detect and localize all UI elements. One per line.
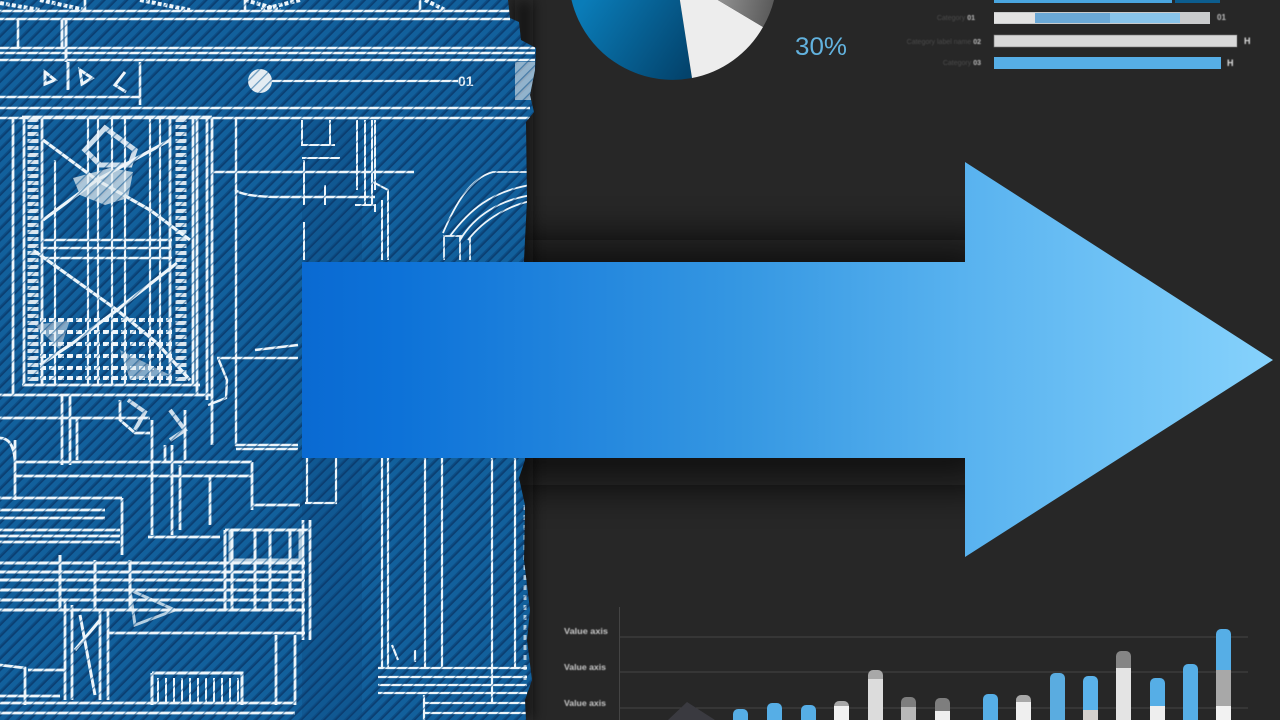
right frame and drawings — [208, 118, 414, 449]
blueprint line art: 01 — [458, 73, 474, 89]
column 3 — [801, 705, 816, 720]
bar row 2: Category 01 — [937, 15, 975, 22]
column 10 — [1050, 673, 1065, 720]
column 13 — [1150, 678, 1165, 720]
chart axes and gridlines — [620, 607, 1248, 720]
arrow drop shadow — [470, 240, 990, 485]
symbol row — [45, 20, 126, 92]
column 7 — [935, 698, 950, 720]
pie sector: white — [676, 0, 763, 78]
truss structure — [0, 117, 213, 445]
axis labels: Value axis — [564, 627, 609, 636]
panel: blueprint — [0, 0, 540, 720]
triangle marker — [668, 702, 715, 720]
percentage label: 30% — [795, 33, 847, 61]
bar row 3: Category label name 02 — [907, 39, 981, 46]
upper lower-right structure — [305, 458, 527, 720]
column 11 — [1083, 676, 1098, 720]
pipe curves — [443, 172, 537, 260]
blueprint line art — [0, 0, 537, 720]
bar row 4: Category 03 — [943, 60, 981, 67]
column chart — [564, 607, 1248, 720]
bar row 4 — [943, 57, 1234, 69]
bar row 3 — [907, 35, 1250, 47]
main arrow — [302, 162, 1273, 557]
column 2 — [767, 703, 782, 720]
column 5 — [868, 670, 883, 720]
pie sector: gray — [676, 0, 776, 27]
axis labels: Value axis — [564, 699, 607, 708]
column 9 — [1016, 695, 1031, 720]
torn edge shadow — [515, 0, 533, 720]
bar row 2: 01 — [1217, 13, 1226, 22]
top frame lines — [0, 0, 535, 118]
column 1 — [733, 709, 748, 720]
bar row 4: H — [1227, 58, 1234, 68]
axis labels: Value axis — [564, 663, 607, 672]
pie sector: blue — [569, 0, 692, 80]
axis labels — [564, 627, 609, 708]
column 6 — [901, 697, 916, 720]
bar row 3: H — [1244, 36, 1250, 46]
pie chart — [569, 0, 776, 80]
bar row 2 — [937, 12, 1226, 24]
horizontal bar chart — [907, 0, 1250, 69]
lower left structure — [0, 395, 310, 640]
column 14 — [1183, 664, 1198, 720]
column 12 — [1116, 651, 1131, 720]
column 4 — [834, 701, 849, 720]
bar row 1 — [994, 0, 1220, 3]
column 15 — [1216, 629, 1231, 720]
callout marker — [248, 69, 272, 93]
column 8 — [983, 694, 998, 720]
